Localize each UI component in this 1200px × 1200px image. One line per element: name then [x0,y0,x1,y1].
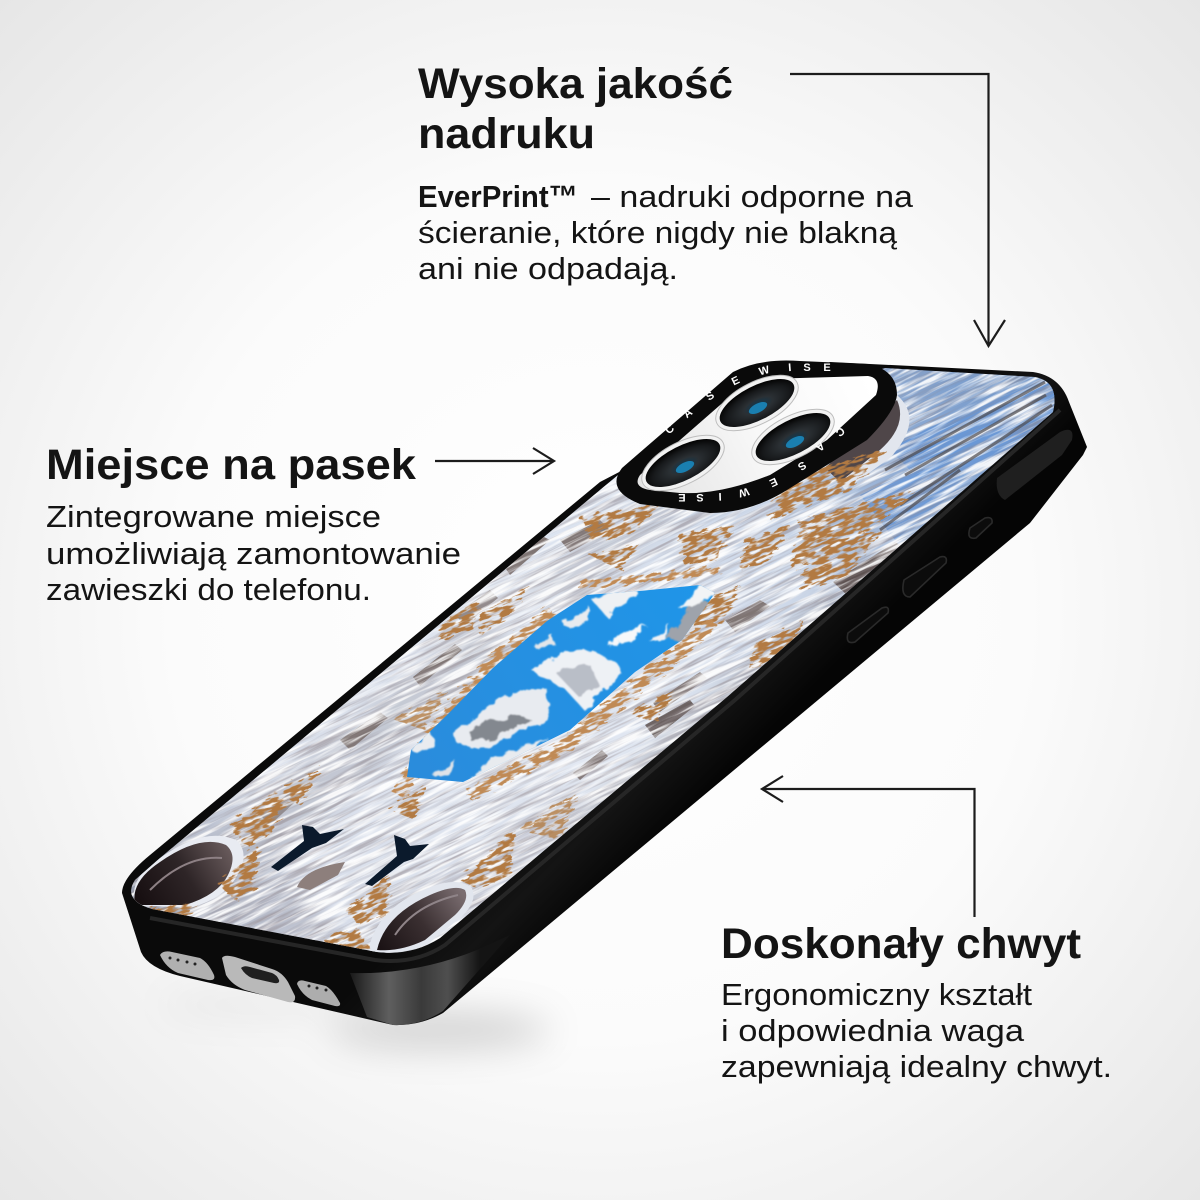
bottom speaker grille left [160,951,214,980]
ring lettering [663,362,847,503]
side buttons [847,518,992,643]
ring lettering: S [696,491,704,503]
ring lettering: W [758,364,771,378]
heading: strap slot: Miejsce na pasek [46,441,416,489]
arches [134,395,909,953]
tonal shading [218,504,844,938]
arrow: print quality to case [790,74,1005,346]
ring lettering: S [803,362,811,374]
sky opening [407,585,715,782]
camera frame [616,360,897,513]
ring lettering: A [813,439,827,454]
gold rim around opening [391,565,723,800]
text block: print quality: ani nie odpadają. [418,251,678,286]
heading: print quality [418,60,733,158]
grey panels [260,520,905,825]
gold ornaments [148,450,917,950]
text block: grip: zapewniają idealny chwyt. [721,1049,1112,1084]
ring lettering: C [833,424,847,438]
ring lettering: W [737,485,750,499]
ground shadow [160,995,550,1048]
ring lettering: E [730,374,742,388]
heading: print quality: nadruku [418,110,595,158]
ring lettering: S [704,389,717,404]
text block: print quality: ścieranie, które nigdy nie blakną [418,215,898,250]
camera glass [638,376,878,493]
heading: print quality: Wysoka jakość [418,60,733,108]
text block: strap slot: zawieszki do telefonu. [46,572,371,607]
bottom speaker grille right [297,980,340,1006]
arrow: grip [762,776,974,917]
text block: print quality: EverPrint™ [418,179,578,214]
clouds [411,585,716,780]
charging port [222,956,295,1002]
glossy bottom corner [350,935,510,1025]
text block: grip: Ergonomiczny kształt [721,977,1032,1012]
phone case [122,360,1087,1026]
blue upper stripes [860,378,1056,540]
lens lower left [633,424,733,502]
ring lettering: C [663,423,677,437]
text block: print quality [418,179,914,286]
text block: strap slot [46,499,461,607]
ring lettering: I [718,490,722,502]
ring lettering: I [788,362,792,374]
marble streak texture [131,368,1054,953]
lens top [707,364,807,442]
ring lettering: E [823,362,831,374]
text block: strap slot: umożliwiają zamontowanie [46,536,461,571]
statues [271,825,429,886]
side rim highlight [150,410,1060,961]
arrow: strap slot [435,448,554,474]
lens right [743,398,843,476]
ring lettering: E [678,491,686,503]
heading: grip: Doskonały chwyt [721,920,1081,968]
ring lettering: S [795,458,808,472]
print artwork [131,360,1055,994]
ring lettering: A [681,406,695,421]
ring lettering: E [767,475,779,489]
text block: print quality: – nadruki odporne na [591,179,914,214]
text block: grip [721,977,1112,1084]
side bump [997,430,1072,500]
camera module [616,360,897,513]
text block: grip: i odpowiednia waga [721,1013,1025,1048]
case body [122,362,1087,1025]
text block: strap slot: Zintegrowane miejsce [46,499,381,534]
upper dark lines [880,382,1052,530]
